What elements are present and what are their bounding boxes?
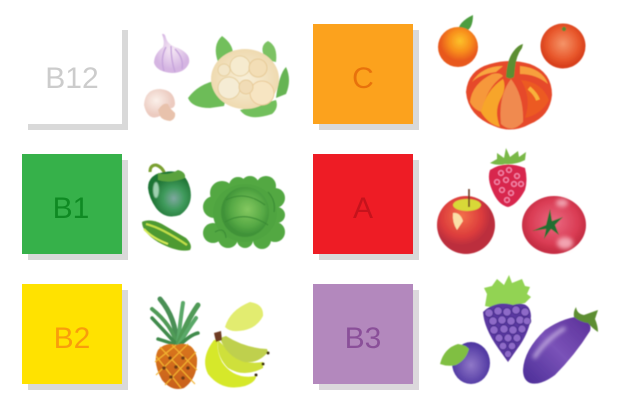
- label: B3: B3: [345, 322, 381, 355]
- icon: cauliflower: [188, 36, 289, 117]
- panel: B2: [22, 284, 128, 390]
- panel: B12: [22, 24, 128, 130]
- icon: strawberry: [489, 148, 526, 207]
- icon: orange: [540, 24, 586, 68]
- icon: eggplant: [523, 307, 598, 384]
- label: B2: B2: [54, 322, 90, 355]
- label: B1: B1: [53, 192, 89, 225]
- icon: tomato: [522, 196, 586, 254]
- panel: A: [313, 154, 419, 260]
- icon: pumpkin: [466, 44, 552, 130]
- label: B12: B12: [45, 62, 99, 95]
- panel: B1: [22, 154, 128, 260]
- icon: garlic: [154, 34, 189, 73]
- icon: peach: [438, 15, 478, 67]
- label: A: A: [353, 192, 373, 225]
- icon: pineapple: [152, 299, 198, 389]
- icon: plum: [440, 342, 490, 384]
- label: C: C: [352, 62, 374, 95]
- icon: mushroom: [144, 89, 175, 121]
- panel: C: [313, 24, 419, 130]
- icon: lemon: [225, 302, 263, 331]
- icon: green pepper: [148, 165, 191, 216]
- panel: B3: [313, 284, 419, 390]
- icon: cabbage: [203, 176, 285, 249]
- icon: red apple: [437, 189, 495, 254]
- icon: cucumber: [142, 220, 191, 251]
- icon: bananas: [205, 331, 270, 388]
- icon: grapes: [483, 275, 531, 362]
